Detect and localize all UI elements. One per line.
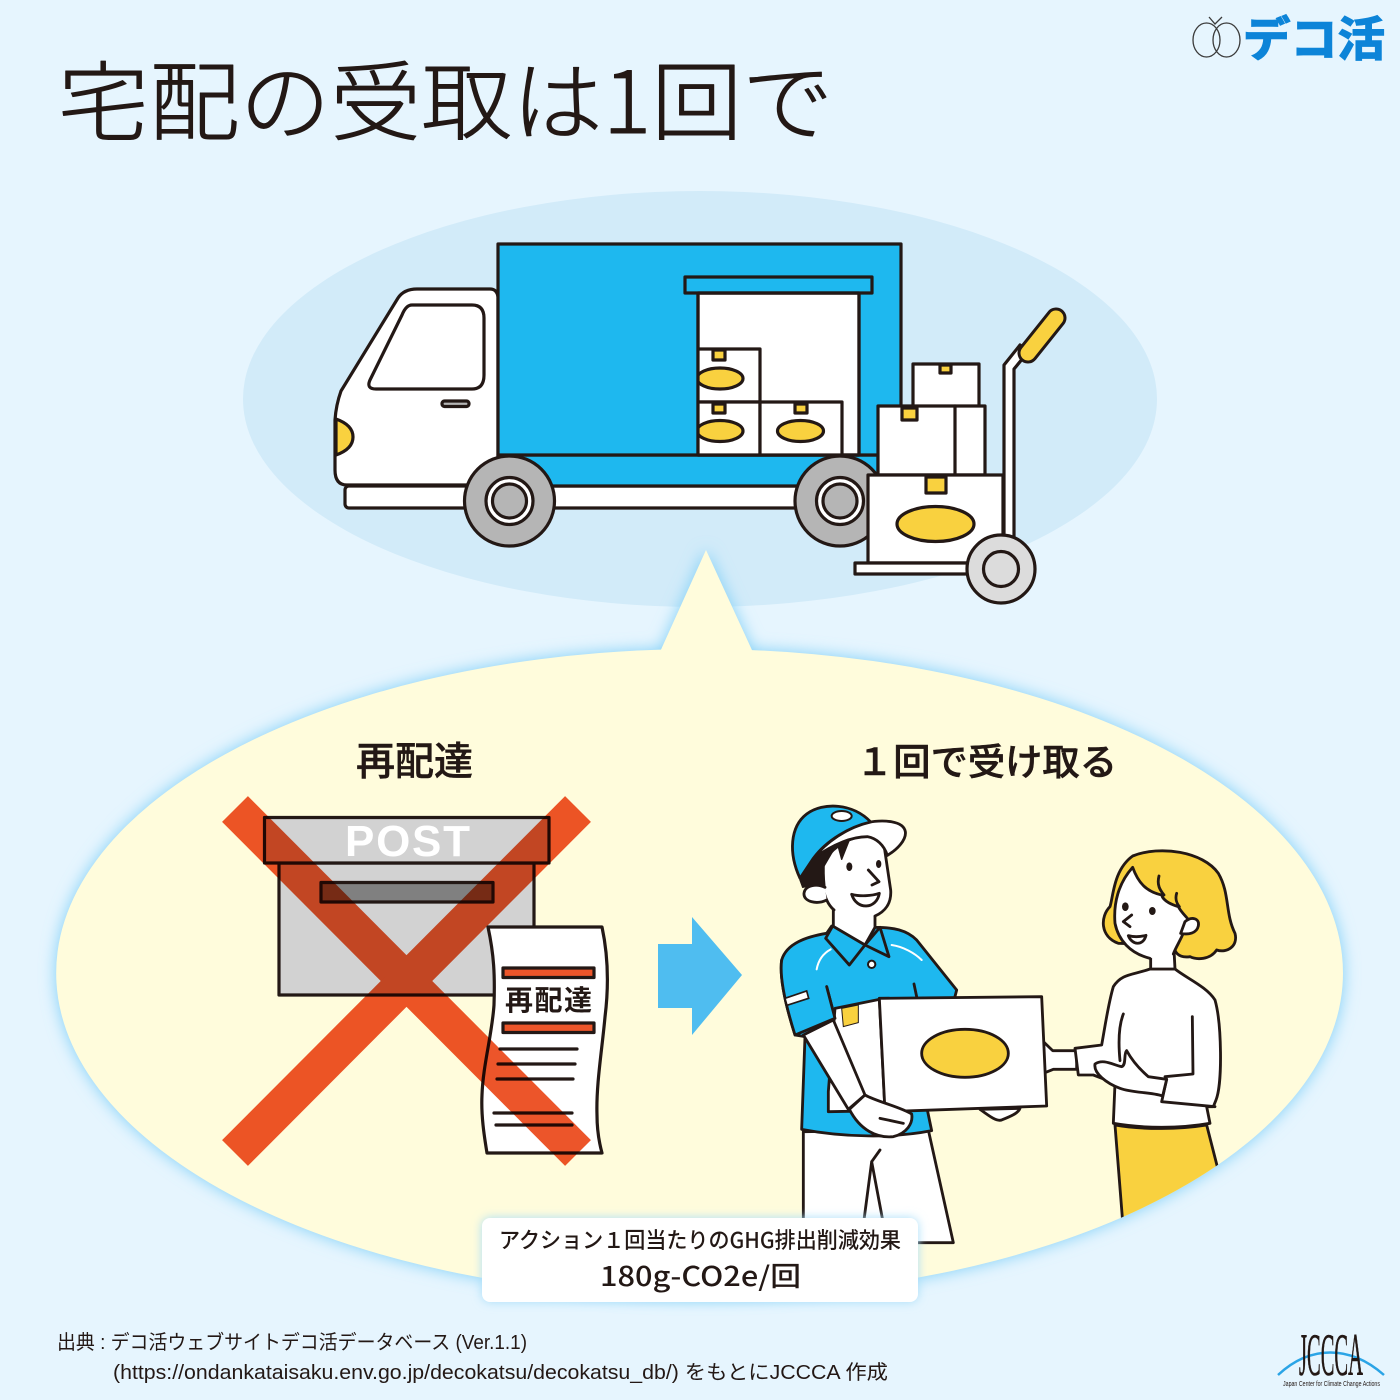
yellow tape [842, 1005, 858, 1027]
sweater lines [1119, 1014, 1193, 1077]
illustration: delivery person and customer [781, 806, 1236, 1243]
background ellipse [243, 191, 1157, 607]
callout value: 180g-CO2e/回 [600, 1255, 801, 1294]
callout caption: アクション１回当たりのGHG排出削減効果 [499, 1223, 901, 1255]
shirt button [868, 961, 875, 968]
cart grip [1028, 318, 1056, 353]
slip lower bar [503, 1023, 594, 1032]
slip top bar [503, 968, 594, 978]
POST label: POST [345, 817, 470, 866]
delivery hand [849, 1095, 912, 1137]
ear [1181, 919, 1199, 934]
post box slot [321, 882, 493, 902]
face details [846, 862, 852, 871]
heading: 再配達: 再配達 [356, 731, 473, 787]
carried box [879, 997, 1047, 1120]
post box lid [264, 818, 549, 863]
slip paper [482, 927, 607, 1153]
hair lines [1158, 876, 1179, 907]
skirt [1114, 1124, 1218, 1218]
headlight [336, 419, 353, 455]
hair [800, 840, 849, 887]
customer [1043, 851, 1236, 1230]
arm [803, 1020, 865, 1109]
rear wheel [795, 456, 885, 546]
cart base [855, 563, 975, 574]
truck chassis [345, 486, 825, 508]
trousers [803, 1130, 953, 1243]
cart middle box [878, 406, 985, 475]
hand [1095, 1051, 1167, 1096]
cap crown [792, 806, 871, 878]
truck cab [335, 289, 498, 485]
cap brim [813, 821, 905, 858]
title: 宅配の受取は1回で [58, 33, 833, 158]
cart pole [1004, 345, 1028, 540]
cart bottom box [868, 475, 1003, 563]
slip lines [494, 1049, 577, 1125]
post box body [279, 863, 534, 995]
box side [828, 999, 885, 1112]
illustration: post box [264, 817, 549, 995]
door handle [442, 401, 469, 406]
illustration: hand cart with boxes [855, 318, 1056, 603]
cart top box [913, 364, 979, 407]
neck [1151, 950, 1175, 969]
shirt highlights [817, 945, 922, 969]
heading: 1回で受け取る: １回で受け取る [856, 732, 1117, 786]
logo: JCCCA [1278, 1322, 1384, 1388]
collar [826, 926, 889, 965]
arrow [658, 917, 742, 1035]
illustration: delivery truck [335, 244, 901, 546]
cuff [1162, 1079, 1215, 1107]
cargo body [498, 244, 901, 455]
illustration: redelivery slip [482, 927, 607, 1153]
cab window [369, 305, 484, 389]
source citation: (https://ondankataisaku.env.go.jp/decokatsu/decokatsu_db/) をもとにJCCCA 作成 [113, 1361, 888, 1384]
source citation: 出典 : デコ活ウェブサイトデコ活データベース (Ver.1.1) [57, 1330, 527, 1354]
ear [804, 885, 827, 902]
neck [833, 907, 875, 945]
customer forearm [1043, 1042, 1077, 1073]
delivery person [781, 806, 957, 1243]
red cross mark [235, 809, 578, 1153]
source citation [57, 1330, 888, 1384]
cargo door opening [698, 293, 859, 455]
shirt body [781, 926, 957, 1136]
front wheel [464, 456, 554, 546]
slip text: 再配達 [505, 979, 592, 1019]
boxes in truck [696, 349, 842, 458]
logo: デコ活: デコ活 [1243, 1, 1385, 70]
sleeve stripe [785, 991, 809, 1005]
cart wheel [967, 535, 1035, 603]
sweater [1075, 969, 1221, 1127]
door shutter bar [685, 277, 872, 293]
face details [1122, 902, 1129, 911]
speech bubble [56, 550, 1343, 1297]
lower cargo band [498, 455, 878, 486]
hair back [1103, 851, 1236, 959]
face [823, 836, 891, 916]
face [1115, 867, 1188, 958]
effect callout [482, 1218, 918, 1302]
sleeve over arm [781, 960, 835, 1035]
